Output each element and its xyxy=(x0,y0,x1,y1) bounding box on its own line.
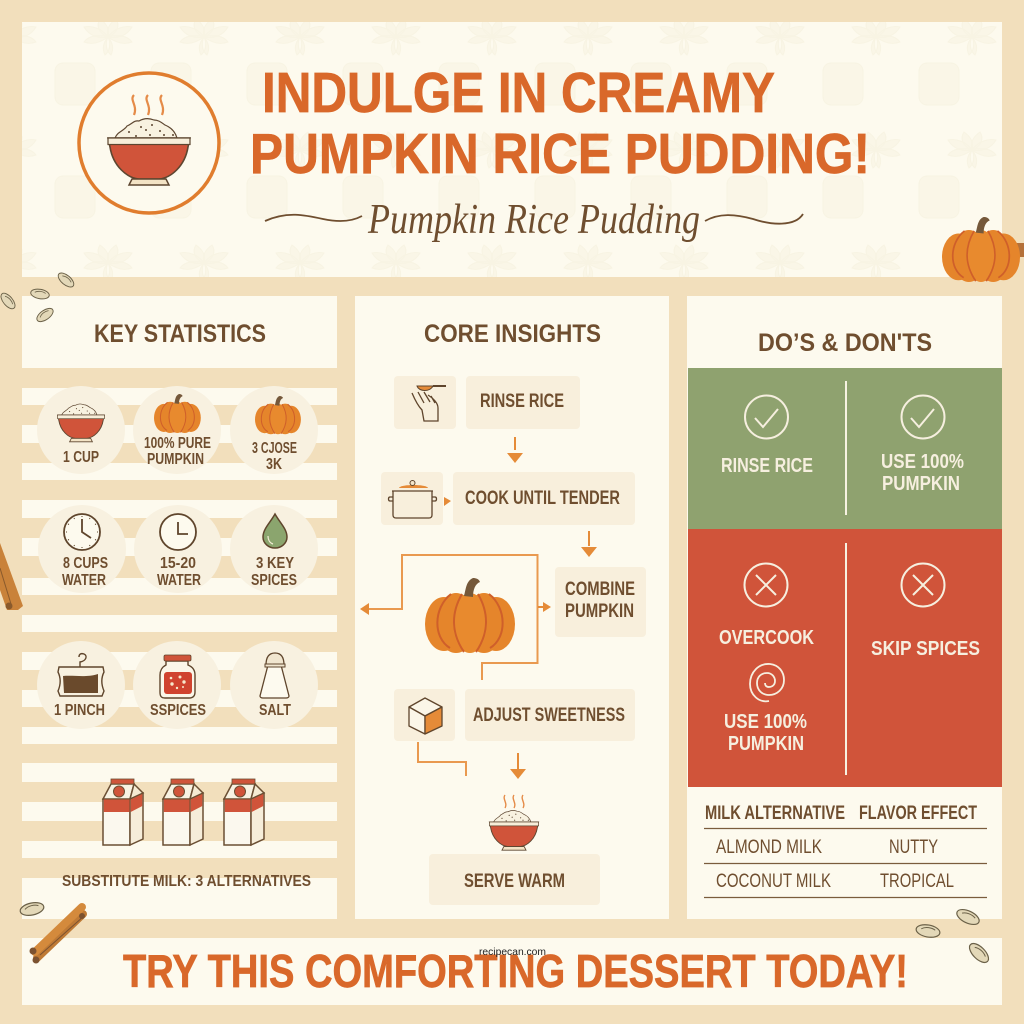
stat: 100% pure pumpkin xyxy=(133,386,221,474)
table: milk alternatives: NUTTY xyxy=(889,837,938,858)
panel: do's and don'ts xyxy=(687,296,1002,919)
don't: use 100% pumpkin: USE 100% xyxy=(724,711,807,733)
step: combine pumpkin xyxy=(555,567,646,637)
stat: 1 cup: 1 CUP xyxy=(63,449,99,466)
connector: below sugar cube xyxy=(418,742,466,776)
decoration: cinnamon behind top right pumpkin xyxy=(1015,243,1024,257)
stat: spices jar: SSPICES xyxy=(150,702,206,719)
stat: salt shaker: SALT xyxy=(259,702,291,719)
title: PUMPKIN RICE PUDDING! xyxy=(250,122,870,186)
icon: sugar cube xyxy=(409,698,442,734)
arrow: cook to combine xyxy=(581,531,597,557)
caption: substitute milk: SUBSTITUTE MILK: 3 ALTERNATIVES xyxy=(62,873,311,890)
icon: hand with spoon xyxy=(412,386,446,421)
step: cook until tender xyxy=(381,472,635,525)
decoration: cinnamon stick left xyxy=(0,543,23,610)
do's block xyxy=(688,368,1002,529)
table: milk alternatives xyxy=(704,803,987,898)
stat: 3 cjose 3k xyxy=(230,386,318,474)
stat: 3 key spices xyxy=(230,505,318,593)
table: milk alternatives: FLAVOR EFFECT xyxy=(859,803,977,824)
heading: key statistics xyxy=(22,296,337,368)
stat: 8 cups water: WATER xyxy=(62,572,106,589)
decoration: pumpkin seeds top left xyxy=(0,270,76,324)
title: INDULGE IN CREAMY xyxy=(262,61,775,125)
heading: do's and don'ts: DO’S & DON'TS xyxy=(758,329,932,357)
don't: use 100% pumpkin xyxy=(724,711,807,755)
stat: 100% pure pumpkin: PUMPKIN xyxy=(147,451,204,468)
don't: skip spices: SKIP SPICES xyxy=(871,638,980,660)
do: use 100% pumpkin: PUMPKIN xyxy=(882,473,960,495)
step: rinse rice xyxy=(394,376,580,429)
title xyxy=(250,61,870,186)
panel: key statistics xyxy=(22,296,337,919)
panel: header xyxy=(22,22,1002,277)
icon: pot xyxy=(388,480,436,518)
arrow: adjust to serve xyxy=(510,753,526,779)
footer banner xyxy=(22,938,1002,1005)
do: rinse rice: RINSE RICE xyxy=(721,455,813,477)
heading: key statistics: KEY STATISTICS xyxy=(94,320,266,348)
decoration: seeds bottom right xyxy=(915,906,992,966)
don'ts block xyxy=(688,529,1002,787)
don't: skip spices xyxy=(871,564,980,660)
icon: swirl xyxy=(750,664,784,701)
do: use 100% pumpkin xyxy=(881,396,964,495)
connector with arrows around pumpkin xyxy=(360,555,551,680)
table: milk alternatives: TROPICAL xyxy=(880,871,954,892)
step: combine pumpkin: PUMPKIN xyxy=(565,601,634,622)
step: combine pumpkin: COMBINE xyxy=(565,579,635,600)
icon: top right pumpkin xyxy=(942,217,1020,282)
don't: use 100% pumpkin: PUMPKIN xyxy=(728,733,804,755)
stat: 15-20 water xyxy=(134,505,222,593)
decoration: cinnamon stick bottom left xyxy=(30,907,85,964)
stat: 15-20 water: 15-20 xyxy=(160,555,196,572)
panel: core insights xyxy=(355,296,669,919)
stat: 1 pinch: 1 PINCH xyxy=(54,702,105,719)
subtitle script with flourishes: Pumpkin Rice Pudding xyxy=(367,197,700,243)
step: rinse rice: RINSE RICE xyxy=(480,391,564,412)
table: milk alternatives: ALMOND MILK xyxy=(716,837,822,858)
step: adjust sweetness: ADJUST SWEETNESS xyxy=(473,705,625,726)
icon: steaming rice bowl in ring xyxy=(79,73,219,213)
stat: 1 pinch xyxy=(37,641,125,729)
step: serve warm xyxy=(429,854,600,905)
arrow: rinse to cook xyxy=(507,437,523,463)
stat: 3 cjose 3k: 3K xyxy=(266,456,282,473)
stat: 1 cup xyxy=(37,386,125,474)
step: adjust sweetness xyxy=(394,689,635,741)
heading: core insights: CORE INSIGHTS xyxy=(424,320,601,348)
table: milk alternatives: MILK ALTERNATIVE xyxy=(705,803,845,824)
stat: 8 cups water: 8 CUPS xyxy=(63,555,108,572)
icon: serving bowl xyxy=(489,795,539,850)
step: serve warm: SERVE WARM xyxy=(464,871,565,892)
do: use 100% pumpkin: USE 100% xyxy=(881,451,964,473)
do: rinse rice xyxy=(721,396,813,477)
icon: large pumpkin xyxy=(425,578,515,653)
decoration: seed bottom left xyxy=(19,901,45,917)
stat: 3 cjose 3k: 3 CJOSE xyxy=(252,440,297,457)
stat: 15-20 water: WATER xyxy=(157,572,201,589)
striped background xyxy=(22,388,337,919)
table: milk alternatives: COCONUT MILK xyxy=(716,871,831,892)
stat: 3 key spices: SPICES xyxy=(251,572,297,589)
icon: milk cartons xyxy=(103,779,264,845)
don't: overcook: OVERCOOK xyxy=(719,627,814,649)
stat: 3 key spices: 3 KEY xyxy=(256,555,294,572)
don't: overcook xyxy=(719,564,814,649)
stat: 100% pure pumpkin: 100% PURE xyxy=(144,435,211,452)
stat: 8 cups water xyxy=(38,505,126,593)
watermark: recipecan.com xyxy=(479,947,546,958)
stat: spices jar xyxy=(133,641,221,729)
step: cook until tender: COOK UNTIL TENDER xyxy=(465,488,620,509)
stat: salt shaker xyxy=(230,641,318,729)
